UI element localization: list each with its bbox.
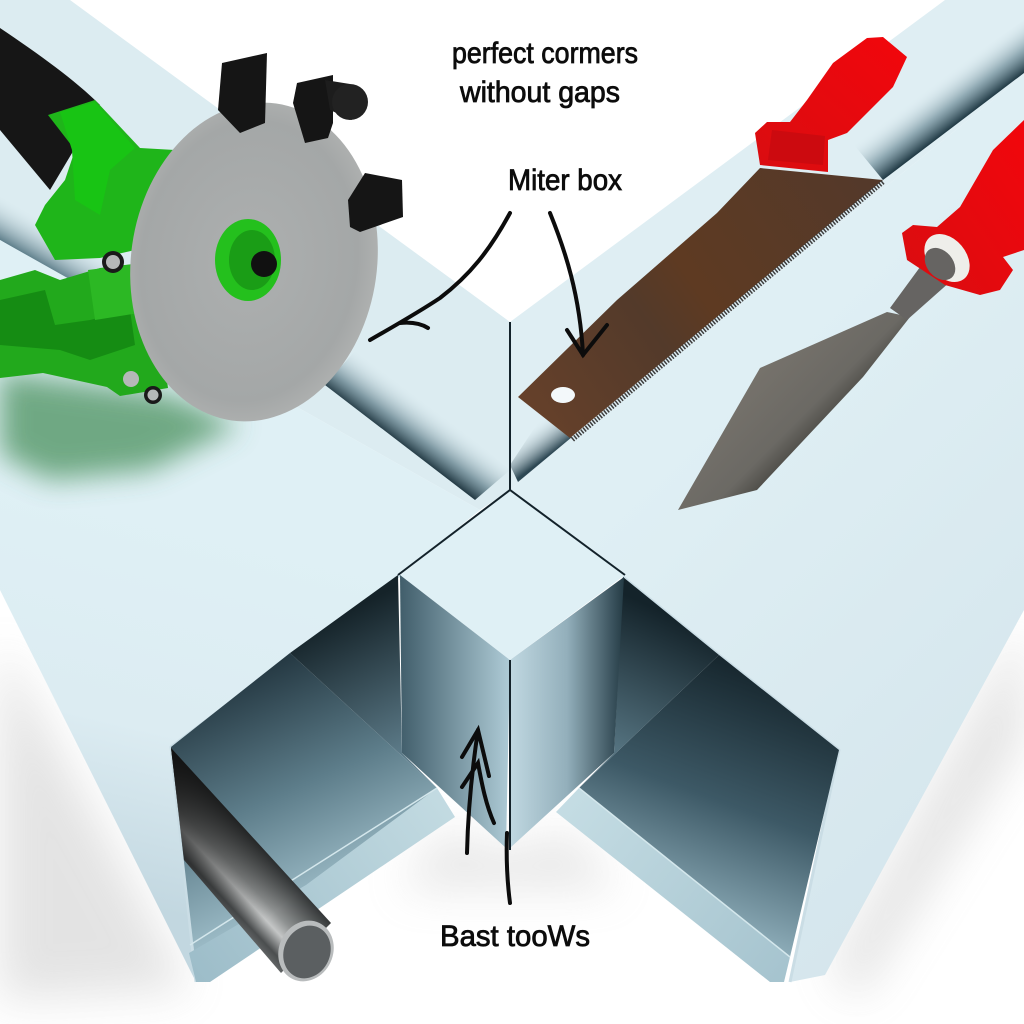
- saw handle: [755, 37, 907, 172]
- chisel: [678, 120, 1024, 510]
- grinder clamp: [0, 262, 168, 396]
- duct: back left: [0, 0, 510, 510]
- arrow: to corner block: [462, 730, 510, 903]
- saw disk: [110, 86, 398, 438]
- ground shadows: [0, 620, 1024, 1000]
- duct: front left: [0, 240, 480, 982]
- chisel handle: [902, 120, 1024, 295]
- arrow: to hand saw: [550, 213, 607, 355]
- chisel collar: [915, 225, 979, 291]
- grinder handle: [0, 28, 100, 190]
- chisel blade: [678, 312, 910, 510]
- saw blade: [518, 168, 883, 438]
- arrow: to grinder side: [370, 213, 510, 340]
- duct opening: left: [171, 575, 455, 982]
- duct: front right: [510, 75, 1024, 982]
- centre corner block: [398, 322, 625, 850]
- duct: back right: [510, 0, 1024, 490]
- label: best tools: Bast tooWs: [440, 920, 590, 953]
- hand saw: [518, 37, 907, 440]
- label: miter box: Miter box: [508, 164, 622, 197]
- title annotation: without gaps: [459, 76, 620, 109]
- duct opening: right: [556, 577, 839, 982]
- title annotation: [452, 37, 638, 109]
- clamps: [218, 53, 267, 133]
- disk hub: [215, 219, 281, 301]
- angle grinder: [0, 28, 403, 438]
- title annotation: perfect cormers: [452, 37, 638, 70]
- grinder body: [35, 100, 175, 260]
- chisel shank: [890, 263, 960, 320]
- pipe: [171, 748, 344, 991]
